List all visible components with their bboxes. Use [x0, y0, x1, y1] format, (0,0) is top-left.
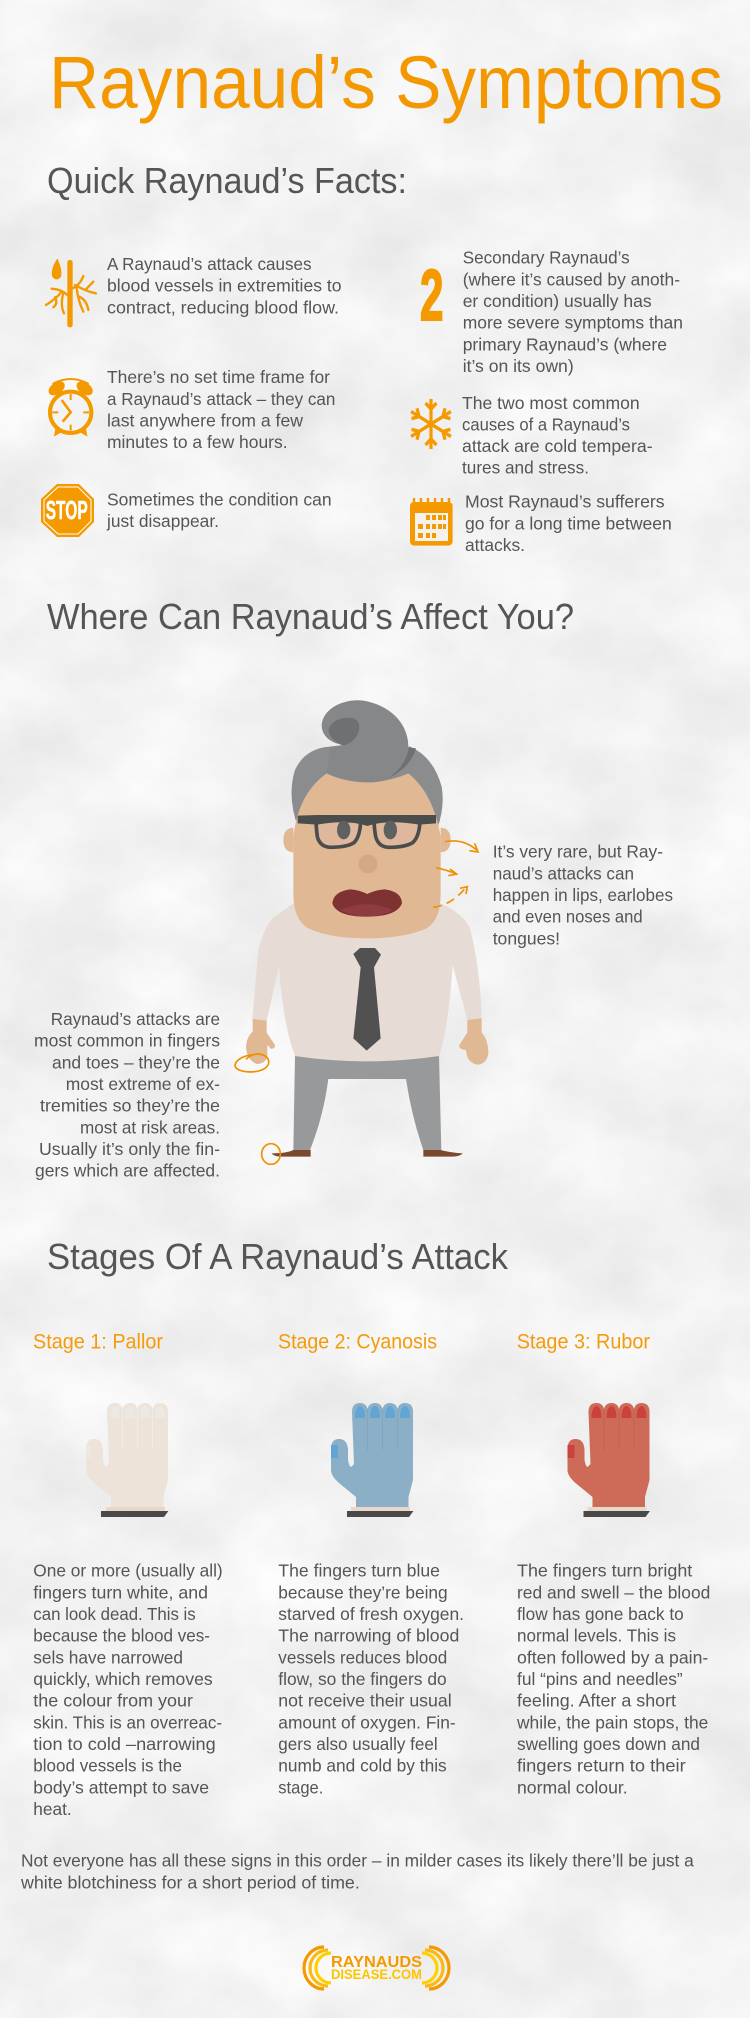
stage 3 text: fingers return to their: [517, 1756, 686, 1776]
stage 2 text: numb and cold by this: [278, 1756, 447, 1776]
callout: rare areas: [493, 842, 673, 948]
panel: stage 2 cyanosis: [278, 1331, 464, 1797]
heading: quick facts: Quick Raynaud’s Facts:: [47, 160, 407, 201]
stage 1 text: sels have narrowed: [33, 1647, 183, 1667]
mouth: [332, 889, 402, 917]
text: causes fact: [462, 393, 653, 478]
stage 3 text: The fingers turn bright: [517, 1561, 692, 1581]
text: long time fact: attacks.: [465, 535, 525, 555]
glasses: [298, 815, 436, 847]
closing note: Not everyone has all these signs in this order – in milder cases its likely there’ll be just a: [21, 1851, 694, 1871]
circle on foot: [262, 1144, 280, 1164]
callout: fingers and toes: and toes – they’re the: [52, 1052, 220, 1072]
closing note: white blotchiness for a short period of time.: [20, 1873, 360, 1893]
text: time frame fact: last anywhere from a few: [107, 410, 303, 430]
text: causes fact: tures and stress.: [462, 458, 589, 478]
callout: fingers and toes: tremities so they’re the: [40, 1096, 220, 1116]
face: [293, 773, 441, 938]
arrows to face: [433, 841, 478, 907]
stage 3 title: Stage 3: Rubor: [517, 1331, 650, 1354]
stage 1 text: body’s attempt to save: [33, 1777, 209, 1797]
hand: blue: [331, 1403, 413, 1517]
stage 1 text: can look dead. This is: [33, 1604, 196, 1624]
text: vessels fact: blood vessels in extremities to: [107, 276, 342, 296]
text: time frame fact: minutes to a few hours.: [107, 432, 288, 452]
stage 1 text: fingers turn white, and: [33, 1582, 208, 1602]
logo: RAYNAUDS: [331, 1954, 422, 1971]
callout: rare areas: It’s very rare, but Ray-: [493, 842, 663, 862]
callout: fingers and toes: [34, 1009, 220, 1181]
stage 3 text: feeling. After a short: [517, 1691, 676, 1711]
text: secondary fact: er condition) usually has: [463, 291, 652, 311]
stage 1 title: Stage 1: Pallor: [33, 1331, 163, 1354]
icon: snowflake: [408, 399, 454, 449]
text: time frame fact: [107, 367, 335, 452]
icon: stop sign: [41, 484, 94, 537]
tongue: [340, 904, 393, 917]
text: secondary fact: more severe symptoms than: [463, 313, 683, 333]
callout: rare areas: naud’s attacks can: [493, 863, 634, 883]
stage 2 text: The narrowing of blood: [278, 1626, 459, 1646]
logo: [304, 1947, 449, 1989]
panel: stage 3 rubor: [516, 1331, 710, 1797]
stage 1 text: heat.: [33, 1799, 72, 1819]
right shoe: [423, 1150, 463, 1157]
text: secondary fact: (where it’s caused by anoth-: [463, 269, 680, 289]
text: time frame fact: There’s no set time frame for: [107, 367, 330, 387]
stage 2 title: Stage 2: Cyanosis: [278, 1331, 437, 1354]
text: disappear fact: Sometimes the condition can: [107, 490, 332, 510]
eyes: [337, 821, 397, 839]
callout: fingers and toes: gers which are affected.: [35, 1161, 220, 1181]
text: vessels fact: contract, reducing blood flow.: [107, 297, 339, 317]
stage 2 text: flow, so the fingers do: [278, 1669, 447, 1689]
text: secondary fact: [463, 248, 683, 376]
right hand: [459, 1018, 488, 1065]
text: disappear fact: just disappear.: [106, 511, 219, 531]
tie: [353, 948, 381, 1051]
callout: rare areas: happen in lips, earlobes: [493, 885, 673, 905]
bun shadow: [329, 718, 416, 779]
icon: stop sign: STOP: [46, 495, 88, 525]
stage 2 text: vessels reduces blood: [278, 1647, 447, 1667]
stage 3 text: normal colour.: [517, 1777, 628, 1797]
stage 1 text: the colour from your: [33, 1691, 193, 1711]
stage 1 text: quickly, which removes: [33, 1669, 213, 1689]
stage 2 text: stage.: [278, 1777, 323, 1797]
stage 3 text: often followed by a pain-: [517, 1647, 708, 1667]
callout: fingers and toes: most extreme of ex-: [66, 1074, 220, 1094]
stage 3 text: normal levels. This is: [517, 1626, 676, 1646]
panel: stage 1 pallor: [33, 1331, 223, 1819]
hand: pale: [86, 1403, 168, 1517]
nose: [359, 855, 377, 873]
logo: DISEASE.COM: [331, 1966, 422, 1982]
callout: rare areas: tongues!: [493, 928, 560, 948]
stage 3 text: [516, 1561, 710, 1797]
shirt: [252, 903, 482, 1061]
text: causes fact: The two most common: [462, 393, 640, 413]
stage 2 text: gers also usually feel: [278, 1734, 438, 1754]
text: vessels fact: [107, 254, 342, 317]
stage 1 text: One or more (usually all): [33, 1561, 223, 1581]
hair bun: [322, 700, 408, 783]
text: secondary fact: primary Raynaud’s (where: [463, 335, 667, 355]
stage 1 text: because the blood ves-: [33, 1626, 210, 1646]
callout: fingers and toes: Usually it’s only the fin-: [39, 1139, 220, 1159]
stage 3 text: red and swell – the blood: [517, 1582, 710, 1602]
hair back: [292, 747, 443, 828]
closing note: [20, 1851, 694, 1893]
stage 1 text: tion to cold –narrowing: [33, 1734, 216, 1754]
callout: rare areas: and even noses and: [493, 907, 643, 927]
pants: [293, 1056, 441, 1150]
stage 1 text: blood vessels is the: [33, 1756, 182, 1776]
title: Raynaud’s Symptoms: [49, 41, 723, 124]
text: secondary fact: it’s on its own): [463, 356, 574, 376]
text: causes fact: attack are cold tempera-: [462, 436, 653, 456]
heading: where can it affect you: Where Can Raynaud’s Affect You?: [47, 596, 574, 637]
stage 3 text: swelling goes down and: [517, 1734, 700, 1754]
icon: calendar: [410, 498, 453, 546]
stage 1 text: skin. This is an overreac-: [33, 1712, 222, 1732]
circle on hand: [235, 1054, 269, 1072]
stage 2 text: not receive their usual: [278, 1691, 452, 1711]
stage 1 text: [33, 1561, 223, 1819]
left shoe: [272, 1150, 311, 1157]
hand: red: [568, 1403, 650, 1517]
stage 2 text: starved of fresh oxygen.: [278, 1604, 464, 1624]
text: secondary fact: Secondary Raynaud’s: [463, 248, 630, 268]
text: time frame fact: a Raynaud’s attack – they can: [107, 389, 335, 409]
stage 2 text: [278, 1561, 464, 1797]
callout: fingers and toes: most common in fingers: [34, 1031, 220, 1051]
callout: fingers and toes: most at risk areas.: [80, 1117, 220, 1137]
text: causes fact: causes of a Raynaud’s: [462, 415, 630, 435]
callout: fingers and toes: Raynaud’s attacks are: [51, 1009, 220, 1029]
stage 2 text: The fingers turn blue: [278, 1561, 440, 1581]
panel: quick facts: [41, 248, 683, 555]
text: long time fact: go for a long time between: [465, 514, 672, 534]
stage 3 text: flow has gone back to: [517, 1604, 684, 1624]
text: long time fact: Most Raynaud’s sufferers: [465, 492, 665, 512]
left hand: [246, 1019, 275, 1064]
icon: blood vessel: [46, 258, 96, 327]
stage 2 text: amount of oxygen. Fin-: [278, 1712, 456, 1732]
stage 3 text: while, the pain stops, the: [516, 1712, 708, 1732]
heading: stages: Stages Of A Raynaud’s Attack: [47, 1236, 509, 1277]
text: vessels fact: A Raynaud’s attack causes: [107, 254, 312, 274]
stage 2 text: because they’re being: [278, 1582, 448, 1602]
text: long time fact: [465, 492, 672, 555]
ears: [283, 828, 451, 852]
icon: alarm clock: [46, 379, 95, 437]
stage 3 text: ful “pins and needles”: [517, 1669, 683, 1689]
text: disappear fact: [106, 490, 332, 531]
illustration: man with annotations: [235, 700, 488, 1164]
icon: number two: 2: [420, 256, 444, 336]
